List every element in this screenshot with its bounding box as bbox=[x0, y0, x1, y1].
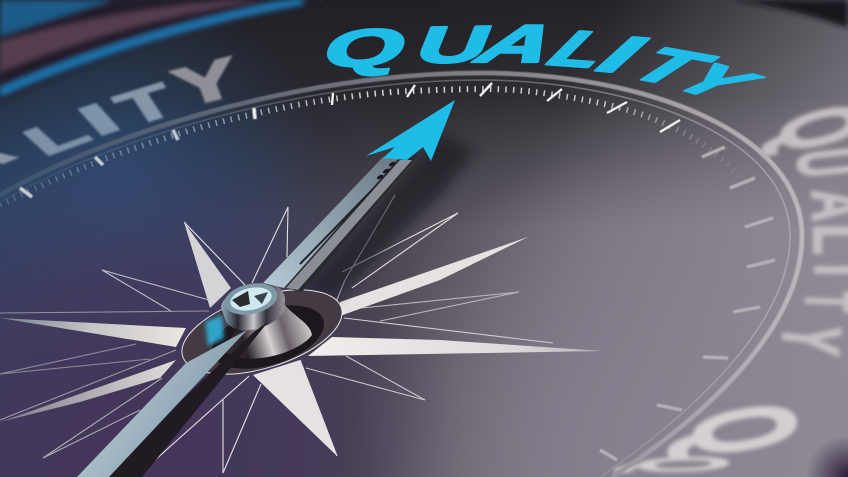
title: QUALITY: L bbox=[531, 20, 634, 78]
title: QUALITY: T bbox=[607, 39, 733, 94]
ghost word: QUALITY right, blurred: Q bbox=[613, 454, 754, 475]
compass star bbox=[0, 195, 603, 477]
star: solid white points bbox=[0, 222, 603, 456]
ghost word: QUALITY right, blurred bbox=[613, 93, 848, 475]
title: QUALITY bbox=[317, 14, 780, 106]
needle bbox=[77, 100, 455, 477]
title: QUALITY: I bbox=[577, 27, 667, 83]
compass hub bbox=[172, 273, 352, 391]
ghost word: QUALITY left, blurred: T bbox=[105, 74, 187, 136]
title: QUALITY: U bbox=[407, 15, 500, 74]
needle shadow bbox=[300, 135, 475, 300]
icon: needle arrowhead bbox=[366, 100, 455, 161]
title: QUALITY: Q bbox=[317, 16, 415, 79]
ghost word: QUALITY left, blurred: I bbox=[66, 94, 133, 145]
title: QUALITY: Y bbox=[650, 56, 780, 106]
hub base disc bbox=[172, 273, 352, 391]
ghost word: QUALITY right, blurred: Q bbox=[661, 394, 827, 466]
dial rim: outer bands at top edge bbox=[0, 0, 848, 102]
minor tick marks bbox=[0, 89, 760, 222]
needle: dots bbox=[376, 161, 396, 180]
major tick marks bbox=[20, 83, 775, 460]
ghost word: QUALITY left, blurred: L bbox=[11, 109, 102, 164]
needle: upper blade bbox=[263, 155, 418, 292]
hub cap bbox=[221, 279, 285, 330]
star: thin outline points bbox=[0, 195, 553, 477]
hub cone bbox=[225, 305, 312, 359]
ghost word: QUALITY left, blurred bbox=[0, 45, 249, 190]
title: QUALITY: A bbox=[461, 14, 577, 74]
needle: lower blade bbox=[77, 322, 268, 477]
ghost word: QUALITY left, blurred: Y bbox=[165, 45, 249, 119]
